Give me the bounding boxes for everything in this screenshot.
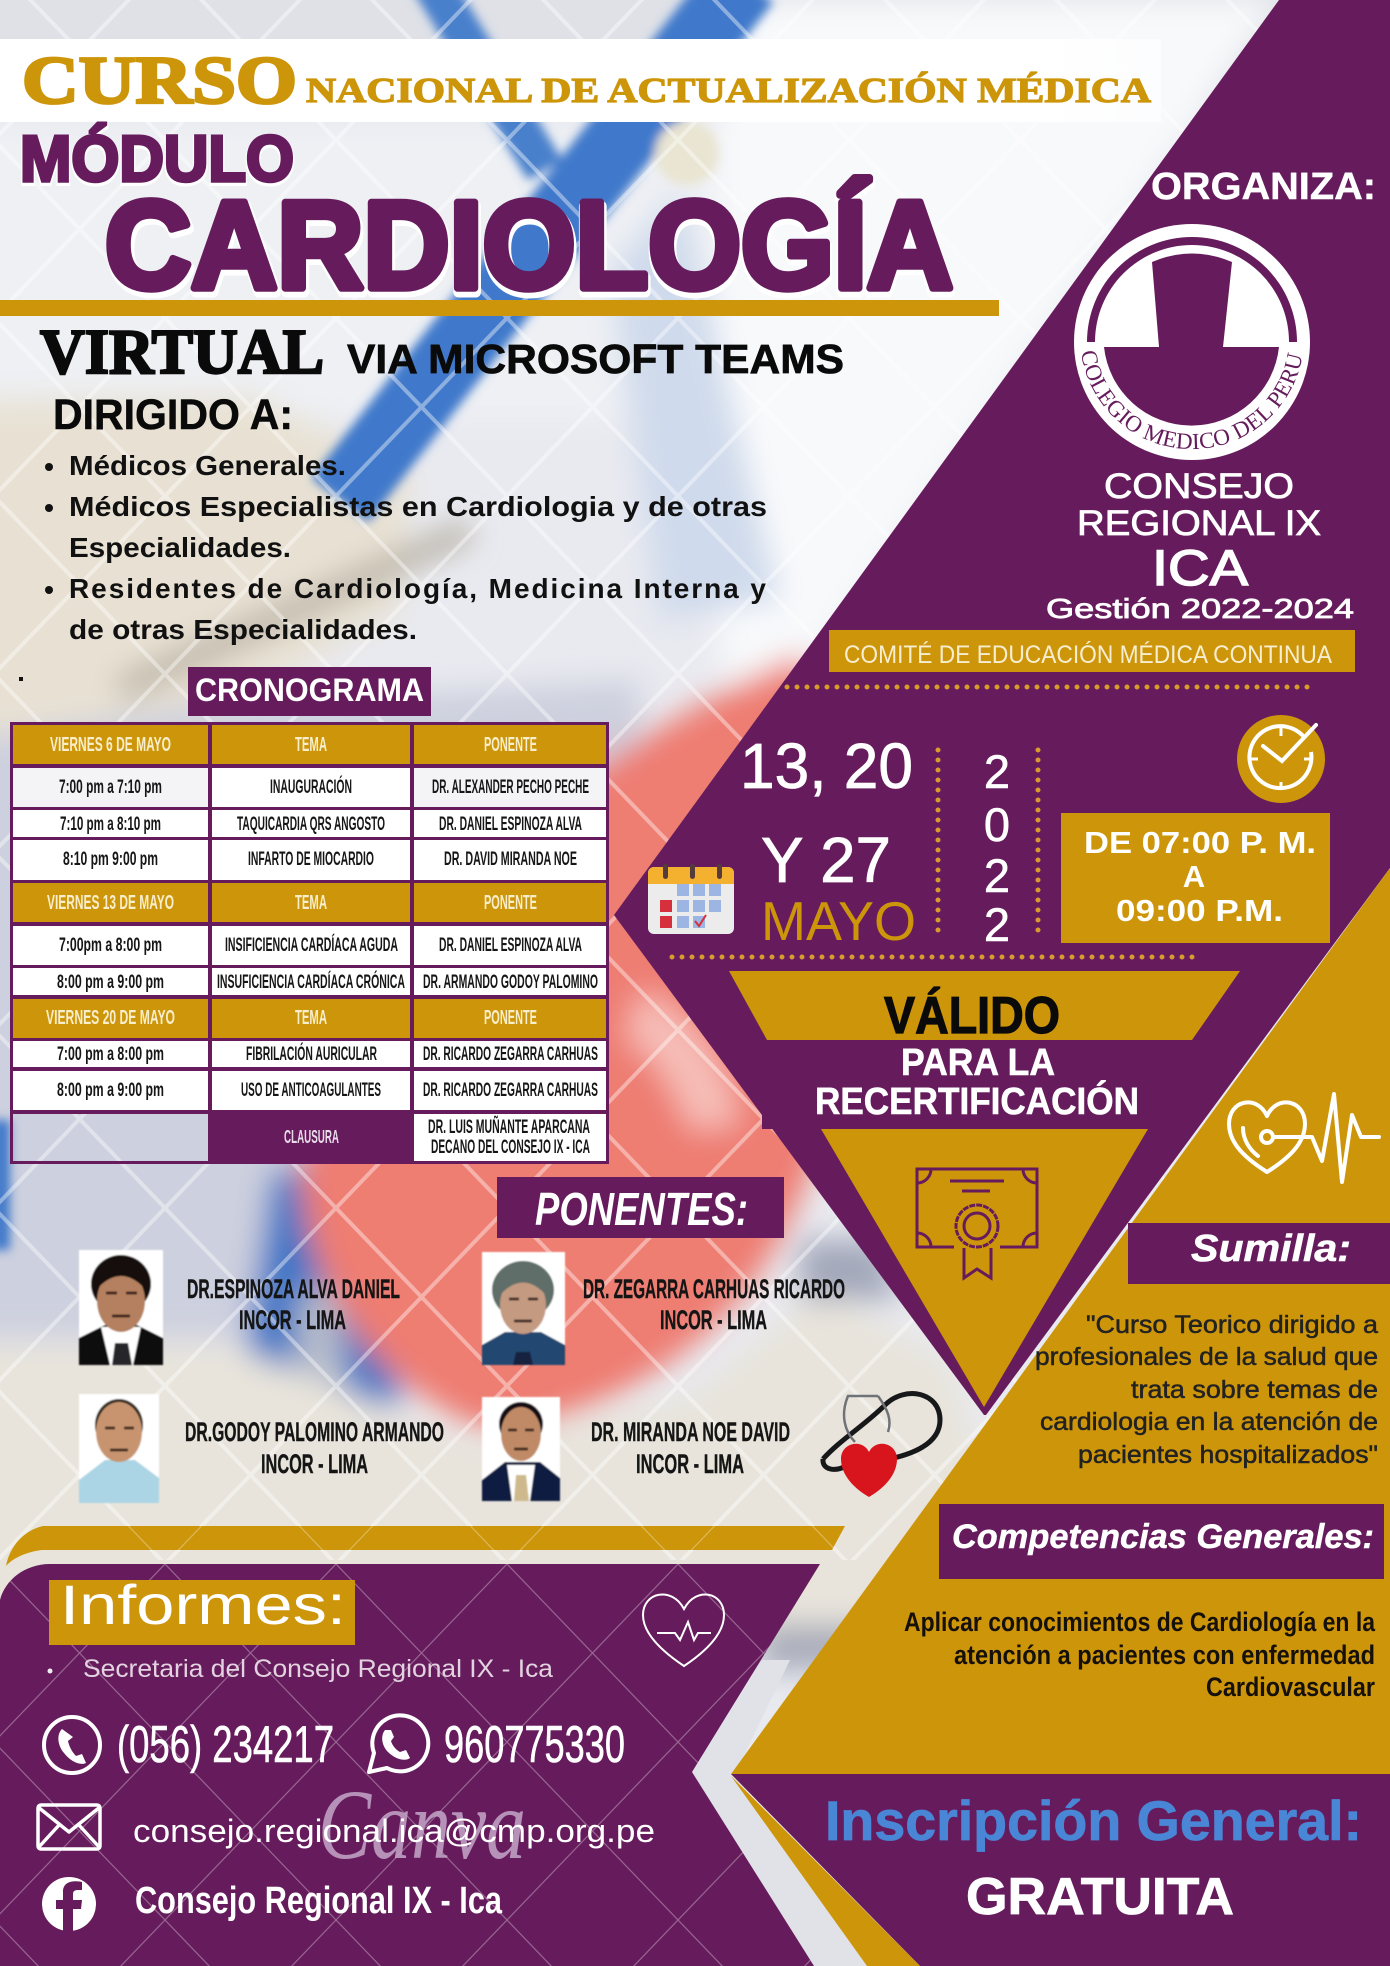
- panel: purple registration: [731, 1774, 1390, 1966]
- text: gratuita: GRATUITA: [966, 1868, 1234, 1926]
- table rows: 6 de mayo: DR. ALEXANDER PECHO PECHE: [432, 777, 589, 798]
- heading: modulo: MÓDULO: [20, 122, 294, 195]
- text block: ponente names: [185, 1274, 845, 1479]
- heading: virtual: VIRTUAL: [40, 316, 324, 387]
- table row: viernes 13 header: TEMA: [295, 892, 327, 914]
- heading: competencias: Competencias Generales:: [952, 1518, 1374, 1556]
- icon: heart outline: [643, 1594, 724, 1666]
- table rows: 13 de mayo: DR. ARMANDO GODOY PALOMINO: [423, 972, 598, 993]
- text: facebook name: Consejo Regional IX - Ica: [135, 1880, 503, 1922]
- text block: dates: [740, 730, 916, 952]
- panel: lower gold triangle: [821, 1129, 1148, 1407]
- text block: ponente names: INCOR - LIMA: [239, 1305, 346, 1335]
- table row: viernes 13 header: VIERNES 13 DE MAYO: [47, 892, 174, 914]
- table rows: 20 de mayo: FIBRILACIÓN AURICULAR: [246, 1043, 377, 1065]
- text block: sumilla: pacientes hospitalizados": [1078, 1441, 1378, 1469]
- text block: consejo regional: CONSEJO: [1104, 467, 1294, 506]
- heading: sumilla: Sumilla:: [1191, 1228, 1351, 1270]
- icon: stethoscope with red heart: [823, 1394, 940, 1497]
- box: time: DE 07:00 P. M.: [1084, 825, 1316, 860]
- table rows: 20 de mayo: CLAUSURA: [284, 1127, 339, 1147]
- gold rule: [0, 300, 999, 316]
- panel: informes bottom left: [0, 1526, 845, 1966]
- text block: sumilla: [1035, 1311, 1378, 1469]
- heading: informes: [49, 1573, 355, 1645]
- text block: ponente names: DR.ESPINOZA ALVA DANIEL: [187, 1274, 400, 1304]
- table rows: 13 de mayo: DR. DANIEL ESPINOZA ALVA: [439, 935, 582, 956]
- heading: inscripcion: Inscripción General:: [825, 1789, 1362, 1852]
- icon: mail: [38, 1805, 100, 1849]
- text block: sumilla: profesionales de la salud que: [1035, 1343, 1378, 1371]
- text block: year vertical: 2: [984, 745, 1010, 798]
- heading: cronograma: CRONOGRAMA: [195, 672, 424, 708]
- text block: sumilla: cardiologia en la atención de: [1040, 1408, 1378, 1436]
- text block: dates: Y 27: [761, 824, 891, 896]
- banner: comite de educacion: COMITÉ DE EDUCACIÓN MÉDICA CONTINUA: [844, 640, 1332, 669]
- text block: sumilla: "Curso Teorico dirigido a: [1086, 1311, 1378, 1339]
- text: email: consejo.regional.ica@cmp.org.pe: [133, 1813, 655, 1849]
- heading: nacional: NACIONAL DE ACTUALIZACIÓN MÉDICA: [306, 70, 1152, 110]
- text block: year vertical: 2: [984, 898, 1010, 951]
- heading: informes: Informes:: [60, 1573, 346, 1636]
- icon: calendar: [648, 864, 734, 934]
- text block: ponente names: INCOR - LIMA: [636, 1449, 744, 1479]
- banner: comite de educacion: [829, 630, 1355, 672]
- text block: ponente names: DR. ZEGARRA CARHUAS RICARDO: [583, 1274, 845, 1304]
- table row: viernes 6 header: TEMA: [295, 734, 327, 756]
- icon: phone: [44, 1717, 100, 1773]
- heading: cardiologia: CARDIOLOGÍA: [105, 177, 953, 315]
- table row: viernes 20 header: VIERNES 20 DE MAYO: [46, 1007, 175, 1029]
- table rows: 20 de mayo: DR. LUIS MUÑANTE APARCANA: [428, 1116, 590, 1138]
- table row: viernes 20 header: PONENTE: [484, 1007, 537, 1029]
- icon: certificate: [917, 1169, 1037, 1278]
- table row: viernes 6 header: [50, 734, 537, 756]
- text: phone number: (056) 234217: [117, 1716, 334, 1774]
- table rows: 6 de mayo: INAUGURACIÓN: [270, 776, 352, 798]
- text block: audience list: Especialidades.: [69, 532, 291, 563]
- heading: organiza: ORGANIZA:: [1151, 166, 1376, 208]
- table row: viernes 13 header: PONENTE: [484, 892, 537, 914]
- table rows: 13 de mayo: 8:00 pm a 9:00 pm: [57, 972, 164, 993]
- text block: ponente names: DR.GODOY PALOMINO ARMANDO: [185, 1417, 444, 1447]
- box: time: 09:00 P.M.: [1116, 893, 1283, 928]
- table rows: 6 de mayo: DR. DAVID MIRANDA NOE: [444, 849, 577, 870]
- heading: via microsoft teams: VIA MICROSOFT TEAMS: [347, 336, 844, 382]
- heading: ponentes: PONENTES:: [535, 1183, 748, 1235]
- table rows: 6 de mayo: TAQUICARDIA QRS ANGOSTO: [237, 814, 385, 835]
- heading: valido: VÁLIDO: [884, 987, 1060, 1045]
- text block: competencias: [904, 1607, 1376, 1702]
- table rows: 13 de mayo: 7:00pm a 8:00 pm: [59, 935, 162, 956]
- box: recertificacion: RECERTIFICACIÓN: [815, 1079, 1139, 1123]
- text block: audience list: Médicos Especialistas en Cardiologia y de otras: [69, 491, 767, 522]
- panel: right purple diamond: [614, 0, 1390, 1415]
- box: recertificacion: PARA LA: [901, 1042, 1055, 1084]
- text block: year vertical: 0: [984, 798, 1010, 851]
- table row: viernes 20 header: TEMA: [295, 1007, 327, 1029]
- icon: heart with pulse: [1229, 1094, 1379, 1182]
- text block: audience list: [45, 450, 767, 645]
- text block: consejo regional: ICA: [1152, 540, 1249, 596]
- logo: colegio medico del peru: COLEGIO MEDICO DEL PERU: [1082, 351, 1302, 450]
- box: time: [1061, 813, 1330, 943]
- table rows: 20 de mayo: USO DE ANTICOAGULANTES: [241, 1080, 381, 1101]
- text block: consejo regional: [1046, 467, 1354, 624]
- panel: valido upper trapezoid: [729, 971, 1240, 1040]
- icon: whatsapp: [369, 1715, 428, 1772]
- heading: CURSO: CURSO: [22, 42, 297, 118]
- table rows: 20 de mayo: DR. RICARDO ZEGARRA CARHUAS: [423, 1044, 598, 1065]
- heading: modulo: MÓDULO: [20, 124, 294, 197]
- icon: clock: [1237, 715, 1325, 803]
- heading: dirigido a: DIRIGIDO A:: [53, 391, 293, 439]
- table rows: 6 de mayo: 7:10 pm a 8:10 pm: [60, 814, 161, 835]
- table rows: 6 de mayo: INFARTO DE MIOCARDIO: [248, 849, 374, 870]
- gray chevron stripe: [692, 1660, 870, 1966]
- text block: year vertical: 2: [984, 849, 1010, 902]
- text block: audience list: Médicos Generales.: [69, 450, 346, 481]
- table row: viernes 6 header: VIERNES 6 DE MAYO: [50, 734, 171, 756]
- watermark: canva: Canva: [318, 1769, 526, 1880]
- text block: year vertical: [984, 745, 1010, 951]
- text: whatsapp number: 960775330: [444, 1716, 625, 1774]
- table rows: 6 de mayo: DR. DANIEL ESPINOZA ALVA: [439, 814, 582, 835]
- heading: ponentes: [497, 1177, 784, 1238]
- photo: espinoza: [79, 1250, 163, 1365]
- table rows: 13 de mayo: [57, 934, 598, 993]
- text block: sumilla: trata sobre temas de: [1131, 1376, 1378, 1404]
- text block: ponente names: INCOR - LIMA: [261, 1449, 368, 1479]
- logo: colegio medico del peru: [1074, 224, 1310, 460]
- text block: dates: 13, 20: [740, 730, 913, 802]
- text block: audience list: Residentes de Cardiología, Medicina Interna y: [69, 573, 766, 604]
- box: recertificacion: [762, 1040, 1192, 1129]
- table rows: 6 de mayo: 7:00 pm a 7:10 pm: [59, 777, 162, 798]
- table row: viernes 6 header: PONENTE: [484, 734, 537, 756]
- heading: cardiologia: CARDIOLOGÍA: [107, 181, 953, 319]
- table rows: 20 de mayo: DECANO DEL CONSEJO IX - ICA: [431, 1137, 590, 1158]
- table rows: 13 de mayo: INSIFICIENCIA CARDÍACA AGUDA: [225, 934, 398, 956]
- photo: zegarra: [482, 1252, 565, 1365]
- text block: audience list: de otras Especialidades.: [69, 614, 417, 645]
- table row: viernes 13 header: [47, 892, 537, 914]
- text block: consejo regional: REGIONAL IX: [1077, 504, 1321, 543]
- photo: godoy: [79, 1394, 159, 1503]
- table row: viernes 20 header: [46, 1007, 537, 1029]
- heading: sumilla: [1128, 1223, 1390, 1284]
- text block: dates: MAYO: [761, 890, 916, 952]
- table rows: 6 de mayo: 8:10 pm 9:00 pm: [63, 849, 158, 870]
- text block: consejo regional: Gestión 2022-2024: [1046, 593, 1354, 624]
- table rows: 20 de mayo: [57, 1043, 598, 1158]
- panel: gold right: [731, 868, 1390, 1774]
- table rows: 6 de mayo: [59, 776, 589, 870]
- heading: competencias: [939, 1504, 1384, 1579]
- table rows: 20 de mayo: 7:00 pm a 8:00 pm: [57, 1044, 164, 1065]
- text block: ponente names: INCOR - LIMA: [660, 1305, 767, 1335]
- header band: [0, 39, 1161, 122]
- gold sliver: [731, 1776, 920, 1966]
- text block: ponente names: DR. MIRANDA NOE DAVID: [591, 1417, 790, 1447]
- table rows: 13 de mayo: INSUFICIENCIA CARDÍACA CRÓNICA: [217, 971, 405, 993]
- table rows: 20 de mayo: DR. RICARDO ZEGARRA CARHUAS: [423, 1080, 598, 1101]
- box: time: A: [1183, 859, 1205, 894]
- photo: miranda: [482, 1397, 560, 1501]
- icon: facebook: [42, 1877, 96, 1931]
- text: secretaria: Secretaria del Consejo Regional IX - Ica: [83, 1655, 553, 1683]
- table rows: 20 de mayo: 8:00 pm a 9:00 pm: [57, 1080, 164, 1101]
